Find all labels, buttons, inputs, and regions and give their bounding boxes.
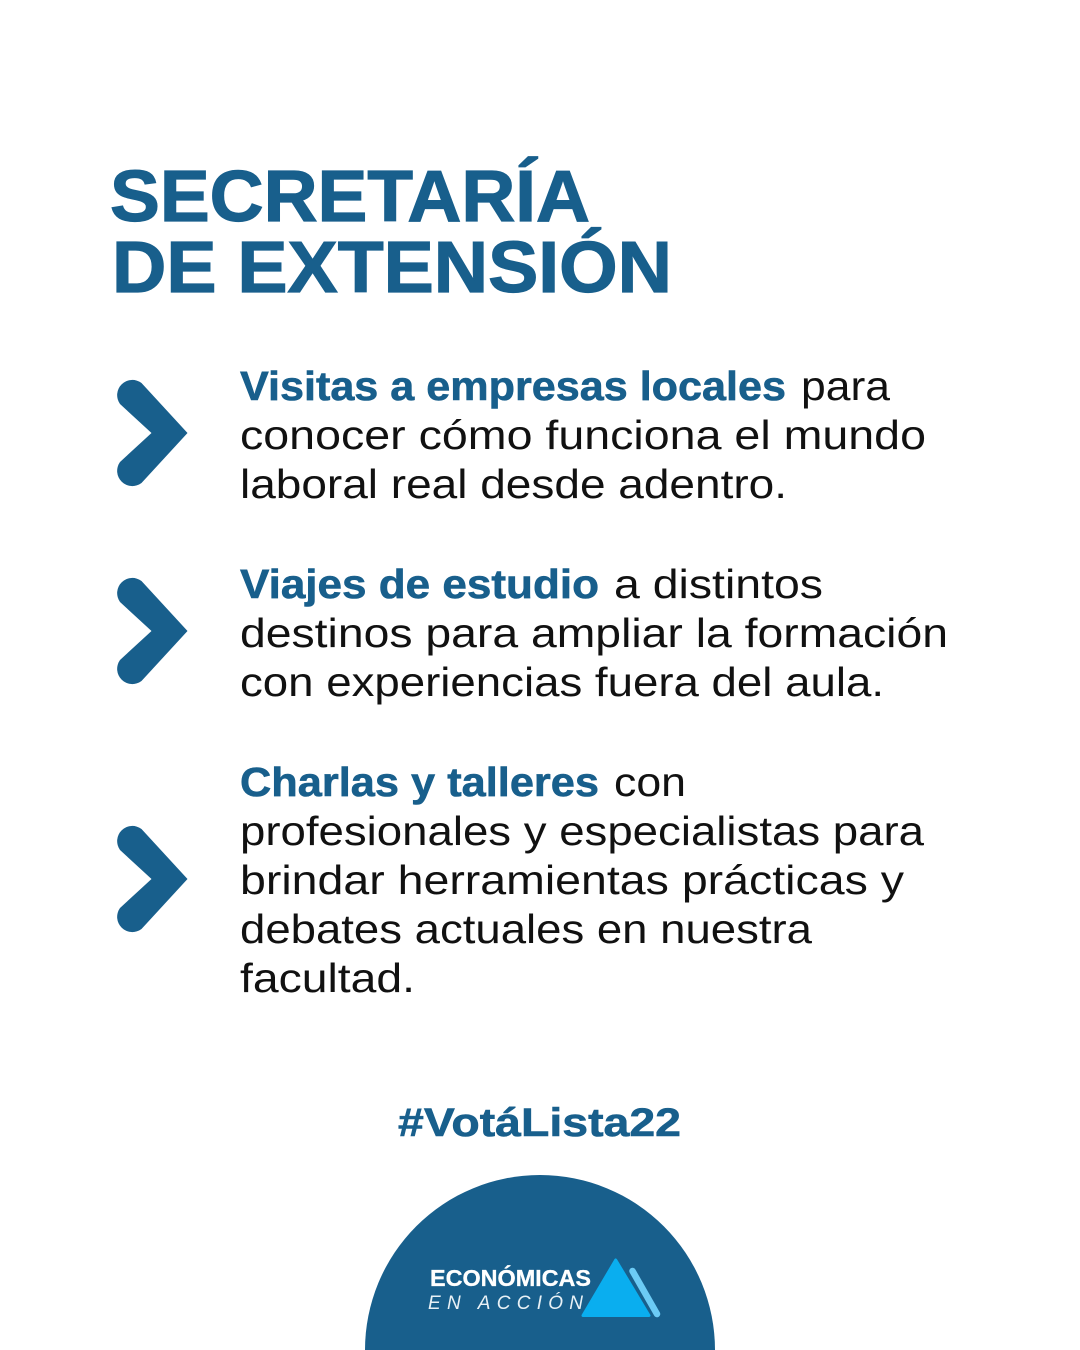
logo tagline: EN ACCIÓN <box>428 1292 583 1314</box>
icon: chevron 3 <box>117 826 188 932</box>
text block: charlas y talleres: con <box>614 759 686 805</box>
text block: charlas y talleres <box>240 759 924 1001</box>
badge semicircle <box>365 1175 715 1350</box>
text block: visitas a empresas locales: Visitas a empresas locales <box>240 363 786 409</box>
text block: viajes de estudio: a distintos <box>614 561 823 607</box>
hashtag: #VotáLista22 <box>398 1101 681 1145</box>
logo wordmark: ECONÓMICAS <box>430 1264 591 1291</box>
text block: charlas y talleres: Charlas y talleres <box>240 759 599 805</box>
text block: visitas a empresas locales: laboral real desde adentro. <box>240 461 787 507</box>
text block: visitas a empresas locales: conocer cómo funciona el mundo <box>240 412 926 458</box>
icon: chevron 1 <box>117 380 188 486</box>
text block: visitas a empresas locales: para <box>801 363 890 409</box>
logo triangle <box>583 1260 649 1316</box>
title: SECRETARÍA <box>110 157 590 237</box>
text block: viajes de estudio: Viajes de estudio <box>240 561 599 607</box>
text block: charlas y talleres: facultad. <box>240 955 415 1001</box>
text block: viajes de estudio <box>240 561 948 705</box>
text block: charlas y talleres: brindar herramientas prácticas y <box>240 857 905 903</box>
text block: visitas a empresas locales <box>240 363 926 507</box>
title: DE EXTENSIÓN <box>112 227 672 308</box>
logo stripe <box>632 1271 657 1314</box>
text block: charlas y talleres: profesionales y especialistas para <box>240 808 924 854</box>
text block: viajes de estudio: con experiencias fuera del aula. <box>240 659 884 705</box>
icon: chevron 2 <box>117 578 188 684</box>
text block: viajes de estudio: destinos para ampliar la formación <box>240 610 948 656</box>
text block: charlas y talleres: debates actuales en nuestra <box>240 906 812 952</box>
logo badge <box>365 1175 715 1350</box>
title <box>110 157 672 308</box>
